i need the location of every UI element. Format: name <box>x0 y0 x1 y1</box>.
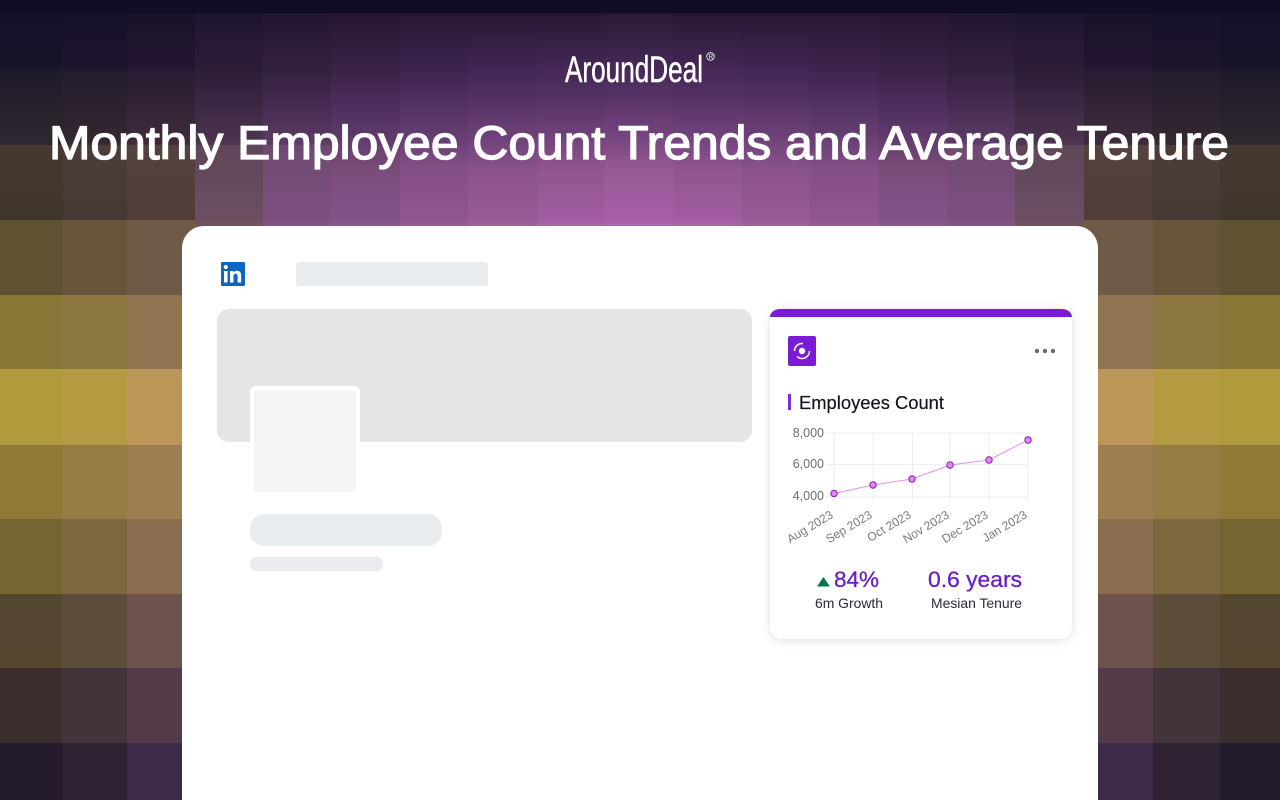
placeholder: subtitle pill <box>250 557 383 571</box>
icon: LinkedIn <box>221 262 245 286</box>
placeholder: cover banner <box>217 309 752 442</box>
stat: 6m growth: 84% <box>834 567 879 592</box>
line chart: 8,000 <box>793 426 824 440</box>
placeholder: avatar <box>250 386 360 496</box>
line chart: Sep 2023 <box>823 507 875 546</box>
line chart: 6,000 <box>793 457 824 471</box>
line chart: Aug 2023 <box>784 507 836 546</box>
line chart: Oct 2023 <box>865 507 914 545</box>
placeholder: name pill <box>250 514 442 546</box>
stat: median tenure: 0.6 years <box>928 567 1022 592</box>
icon: card logo <box>788 336 816 366</box>
heading: employees count: Employees Count <box>799 393 944 413</box>
stat: median tenure <box>928 567 1022 611</box>
logo: AroundDeal: R <box>708 54 714 61</box>
placeholder: page name bar <box>296 262 488 286</box>
panel: white profile page <box>182 226 1098 800</box>
stat: 6m growth <box>815 567 883 611</box>
title: Monthly Employee Count Trends and Average Tenure <box>49 116 1229 169</box>
stat: 6m growth: 6m Growth <box>815 595 883 611</box>
stat: median tenure: Mesian Tenure <box>931 595 1022 611</box>
line chart: Dec 2023 <box>939 507 991 546</box>
panel: employees count card <box>770 309 1072 639</box>
card top accent <box>770 309 1072 317</box>
line chart: 4,000 <box>793 489 824 503</box>
line chart <box>784 426 1031 546</box>
logo: AroundDeal: AroundDeal <box>565 49 703 90</box>
line chart: Jan 2023 <box>980 507 1030 545</box>
line chart: Nov 2023 <box>900 507 952 546</box>
icon: more menu <box>1035 349 1055 353</box>
